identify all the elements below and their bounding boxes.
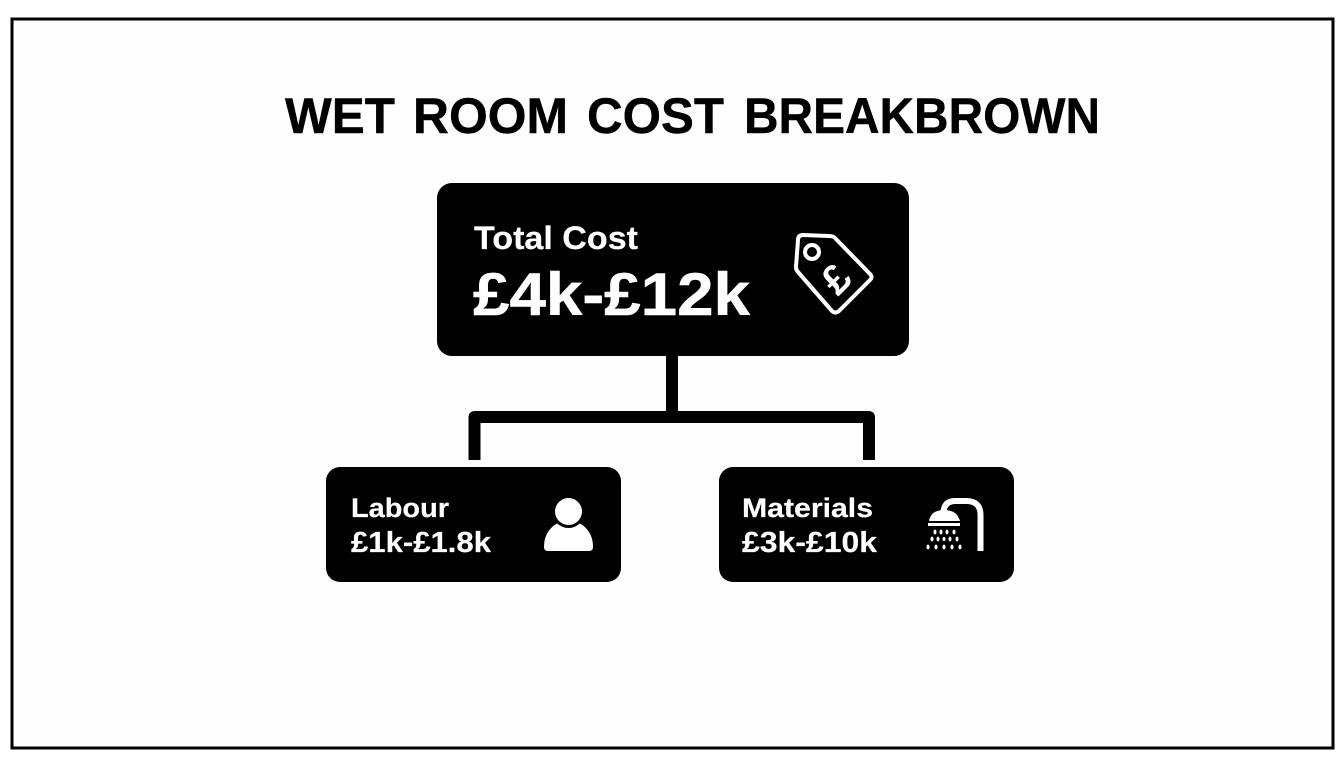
materials value: £3k-£10k	[742, 527, 878, 559]
labour label: Labour	[351, 493, 450, 523]
materials label: Materials	[742, 493, 873, 523]
icon: price tag: £	[812, 255, 860, 303]
icon: person	[544, 495, 593, 551]
title: ROOM	[413, 88, 568, 144]
title	[285, 88, 1100, 144]
title: COST	[587, 88, 724, 144]
title: WET	[285, 88, 395, 144]
panel: total cost	[437, 183, 909, 356]
total cost label: Total Cost	[474, 220, 638, 256]
title: BREAKBROWN	[744, 88, 1100, 144]
total cost value: £4k-£12k	[473, 261, 751, 328]
panel: labour	[326, 467, 621, 582]
labour value: £1k-£1.8k	[351, 527, 492, 559]
icon: price tag	[796, 235, 872, 312]
panel: materials	[719, 467, 1014, 582]
connector lines	[474, 356, 869, 460]
icon: shower	[926, 501, 980, 551]
